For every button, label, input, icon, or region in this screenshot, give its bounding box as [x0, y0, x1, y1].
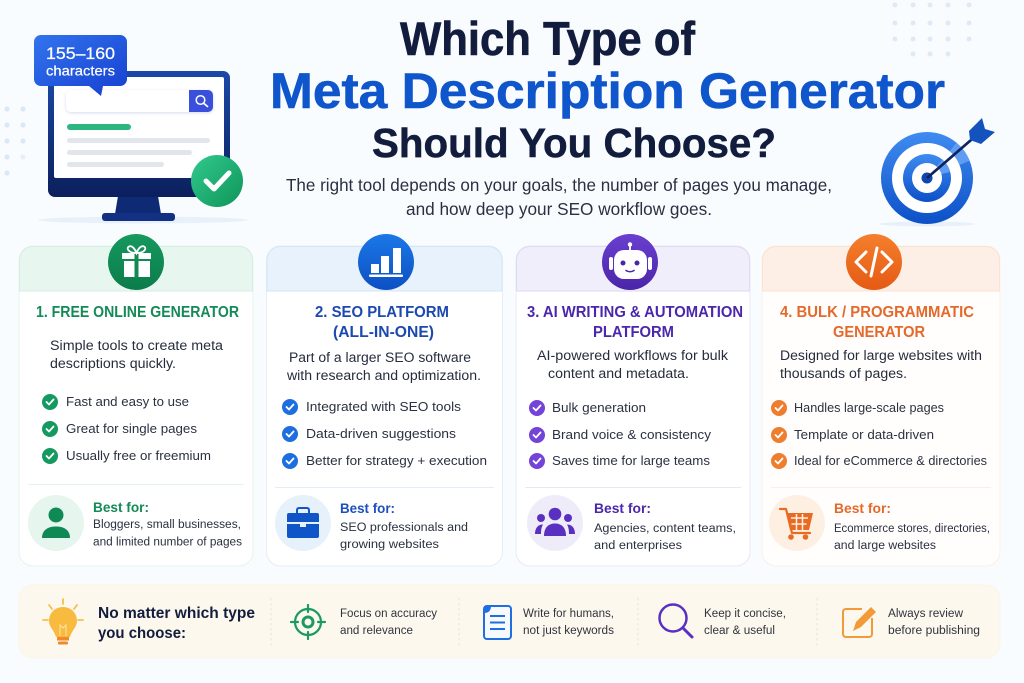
icon: shopping cart: [769, 495, 825, 551]
lead text: No matter which type: [98, 605, 255, 622]
best for: Ecommerce stores, directories,: [834, 523, 990, 535]
panel: AI writing and automation platform: [516, 234, 750, 566]
heading: [780, 304, 974, 341]
tip: concise: [704, 608, 786, 637]
bullet: bulk generation: Bulk generation: [552, 401, 646, 415]
tip: humans: not just keywords: [523, 625, 614, 637]
icon: gift: [108, 234, 164, 290]
icon: crosshair target: [291, 605, 325, 639]
heading: (ALL-IN-ONE): [333, 324, 434, 341]
bullet: large-scale: Handles large-scale pages: [794, 401, 944, 415]
bullet: data-driven: Data-driven suggestions: [306, 427, 456, 441]
icon: person: [28, 495, 84, 551]
panel: bottom tips band: [19, 585, 1000, 658]
tip: review: Always review: [888, 608, 964, 620]
bullet: fast and easy: Fast and easy to use: [66, 395, 189, 409]
description: content and metadata.: [548, 366, 689, 381]
heading: 3. AI WRITING & AUTOMATION: [527, 304, 743, 321]
subtitle: [286, 175, 832, 219]
best for: Bloggers, small businesses,: [93, 519, 241, 531]
best for: and enterprises: [594, 540, 682, 552]
best for: Agencies, content teams,: [594, 523, 736, 535]
bullet: integrated: Integrated with SEO tools: [306, 400, 461, 414]
panel: SEO platform: [266, 234, 502, 566]
card header band: [267, 246, 502, 291]
description: [50, 338, 224, 371]
description: descriptions quickly.: [50, 356, 176, 371]
card header band: [762, 246, 1000, 291]
description: AI-powered workflows for bulk: [537, 348, 728, 363]
title: Should You Choose?: [372, 120, 776, 166]
description: Part of a larger SEO software: [289, 350, 471, 365]
title: [270, 12, 945, 166]
bullet: integrated: [282, 399, 461, 415]
best for: [594, 501, 736, 552]
heading: 2. SEO PLATFORM: [315, 304, 449, 321]
heading: [315, 304, 449, 341]
icon: bar chart: [358, 234, 414, 290]
bullet: bulk generation: [529, 400, 646, 416]
tip: review: before publishing: [888, 625, 980, 637]
best for: [93, 500, 242, 548]
heading: 1. FREE ONLINE GENERATOR: [36, 304, 239, 321]
bullet: data-driven: [282, 426, 456, 442]
best for: [834, 501, 990, 552]
tip: review: [888, 608, 980, 637]
icon: briefcase: [275, 495, 331, 551]
callout: 155-160 characters: 155–160: [46, 44, 115, 63]
icon: team: [527, 495, 583, 551]
illustration: monitor with search bar: [38, 71, 248, 224]
bullet: strategy: Better for strategy + execution: [306, 454, 487, 468]
bullet: saves time: Saves time for large teams: [552, 454, 710, 468]
tip: humans: [523, 608, 614, 637]
callout: 155-160 characters: [34, 35, 127, 96]
bullet: single pages: Great for single pages: [66, 422, 197, 436]
tip: concise: clear & useful: [704, 625, 775, 637]
card header band: [516, 246, 750, 291]
bullet: brand voice: Brand voice & consistency: [552, 428, 712, 442]
best for: Best for:: [834, 501, 891, 516]
tip: accuracy: and relevance: [340, 625, 413, 637]
best for: Best for:: [93, 500, 149, 515]
best for: Best for:: [594, 501, 651, 516]
callout: 155-160 characters: characters: [46, 64, 115, 78]
tip: accuracy: Focus on accuracy: [340, 608, 437, 620]
icon: edit pencil: [843, 607, 876, 637]
card header band: [20, 246, 252, 291]
icon: code brackets: [846, 234, 902, 290]
icon: target with arrow: [879, 118, 995, 226]
lead text: [98, 605, 255, 642]
subtitle: and how deep your SEO workflow goes.: [406, 199, 712, 219]
bullet: freemium: Usually free or freemium: [66, 449, 211, 463]
tip: humans: Write for humans,: [523, 608, 614, 620]
bullet: ecommerce: Ideal for eCommerce & directories: [794, 454, 987, 468]
bullet: fast and easy: [42, 394, 189, 410]
best for: SEO professionals and: [340, 522, 468, 534]
title: Which Type of: [400, 12, 695, 65]
tip: accuracy: [340, 608, 437, 637]
lead text: you choose:: [98, 625, 186, 642]
title: Meta Description Generator: [270, 63, 945, 119]
decorative dots: top right: [892, 2, 972, 56]
best for: [340, 501, 468, 551]
icon: magnifier: [660, 604, 692, 637]
icon: green check badge: [191, 155, 243, 207]
heading: 4. BULK / PROGRAMMATIC: [780, 304, 974, 321]
description: thousands of pages.: [780, 366, 907, 381]
heading: [527, 304, 743, 341]
panel: bulk programmatic generator: [762, 234, 1000, 566]
best for: and limited number of pages: [93, 536, 242, 548]
panel: free online generator: [19, 234, 253, 566]
bullet: single pages: [42, 421, 197, 437]
icon: robot: [602, 234, 658, 290]
description: Simple tools to create meta: [50, 338, 224, 353]
icon: lightbulb: [43, 599, 83, 644]
description: Designed for large websites with: [780, 348, 982, 363]
description: [780, 348, 982, 381]
heading: GENERATOR: [833, 324, 925, 341]
description: [537, 348, 728, 381]
best for: growing websites: [340, 539, 439, 551]
bullet: template: Template or data-driven: [794, 428, 934, 442]
description: [286, 350, 481, 383]
subtitle: The right tool depends on your goals, the number of pages you manage,: [286, 175, 832, 195]
decorative dots: left: [4, 106, 26, 176]
best for: Best for:: [340, 501, 395, 516]
tip: concise: Keep it concise,: [704, 608, 786, 620]
description: with research and optimization.: [286, 368, 481, 383]
best for: and large websites: [834, 540, 936, 552]
heading: PLATFORM: [593, 324, 674, 341]
icon: document: [484, 606, 511, 639]
